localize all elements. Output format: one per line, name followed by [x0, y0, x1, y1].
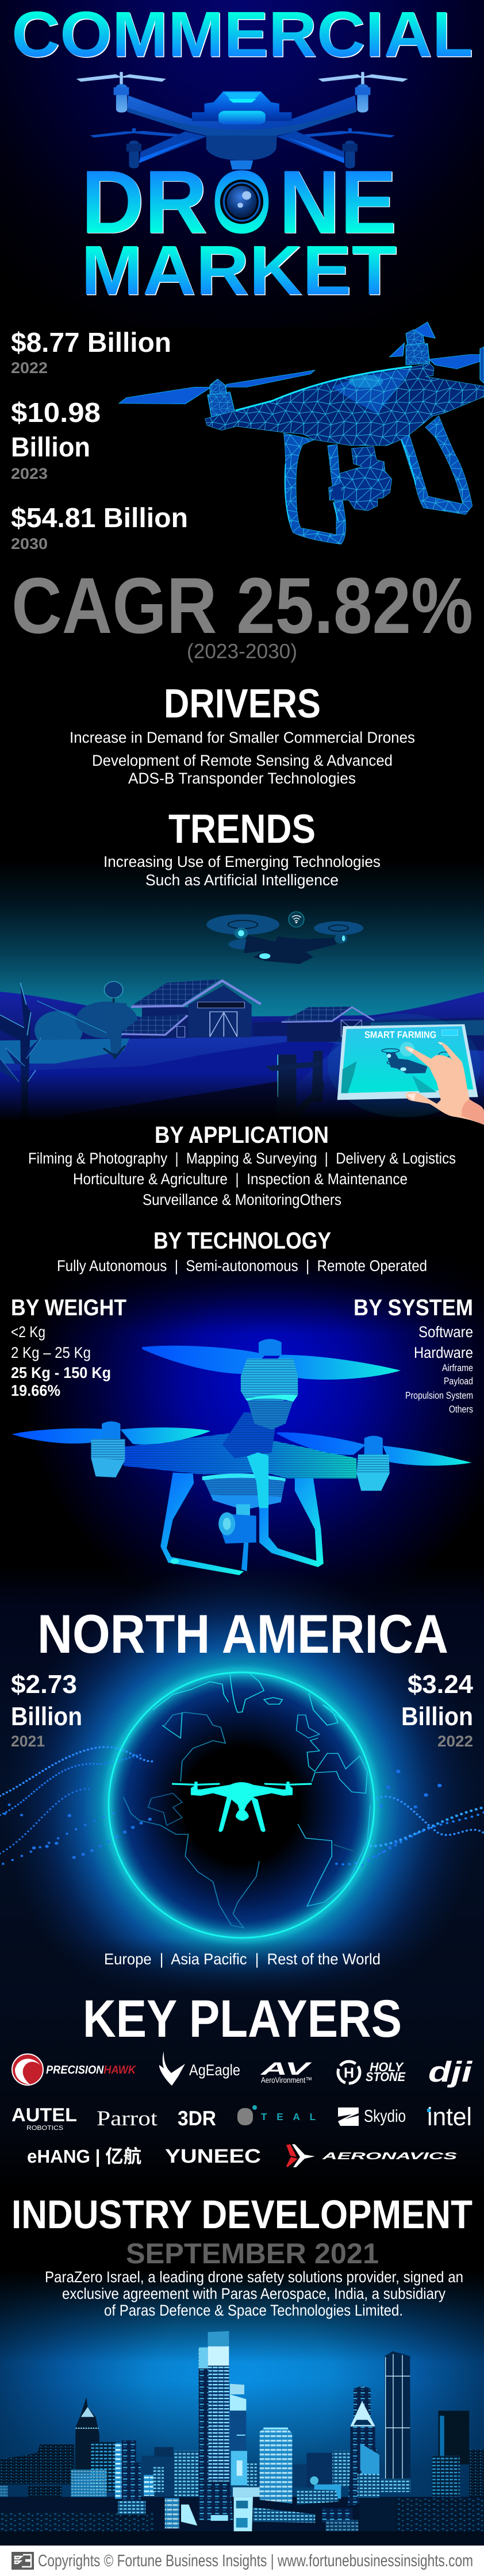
stat: $54.81 Billion 2030: 2030 — [11, 535, 48, 552]
logo: Teal: TEAL — [261, 2112, 316, 2122]
illustration: wireframe drone — [119, 322, 484, 544]
title line: MARKET: MARKET — [82, 232, 398, 310]
heading: KEY PLAYERS: KEY PLAYERS — [83, 1990, 402, 2048]
logo: Parrot: Parrot — [97, 2107, 158, 2130]
logo: Holy Stone: HOLY — [370, 2060, 404, 2074]
title line: COMMERCIAL: COMMERCIAL — [11, 0, 473, 70]
text block: system segments: Software — [418, 1323, 473, 1341]
text block: weight segments: 2 Kg – 25 Kg — [11, 1344, 91, 1361]
text block: drivers: ADS-B Transponder Technologies — [128, 770, 356, 787]
text block: system segments: Hardware — [414, 1344, 473, 1361]
logo: Yuneec: YUNEEC — [165, 2145, 261, 2167]
text block: system segments: Others — [449, 1404, 473, 1415]
stat: $54.81 Billion 2030: $54.81 Billion — [11, 503, 188, 533]
title line: DRONE: NE — [279, 152, 397, 252]
heading: CAGR 25.82%: (2023-2030) — [187, 639, 297, 663]
stat: $2.73 Billion 2021: 2021 — [11, 1733, 45, 1750]
illustration: globe with drone — [109, 1672, 374, 1938]
title line: COMMERCIAL: COMMERCIAL — [13, 0, 474, 71]
stat: $3.24 Billion 2022: Billion — [401, 1702, 473, 1731]
text block: development description: exclusive agreement with Paras Aerospace, India, a subsidiary — [62, 2285, 445, 2302]
stat: $2.73 Billion 2021: $2.73 — [11, 1669, 77, 1699]
logos: key players — [11, 2051, 473, 2167]
text block: development description: of Paras Defence & Space Technologies Limited. — [104, 2302, 403, 2319]
logo: Autel Robotics: AUTEL — [11, 2104, 77, 2125]
text block: trends — [103, 853, 381, 889]
stat: $2.73 Billion 2021: Billion — [11, 1702, 82, 1731]
logo: Holy Stone — [338, 2060, 406, 2084]
icon: Fortune Business Insights logo — [11, 2552, 34, 2570]
logo: AeroVironment: AeroVironment™ — [261, 2075, 312, 2084]
icon: flying drone with wifi — [206, 912, 363, 964]
stat: $3.24 Billion 2022: 2022 — [437, 1733, 473, 1750]
icon: tablet with hand: SMART FARMING — [364, 1030, 436, 1040]
illustration: smart farm at night — [0, 912, 484, 1138]
stat: $54.81 Billion 2030 — [11, 503, 188, 552]
stat: $10.98 Billion 2023: 2023 — [11, 465, 48, 482]
logo: Holy Stone: H — [344, 2065, 354, 2081]
stat: $10.98 Billion 2023: $10.98 — [11, 398, 101, 428]
stat: $3.24 Billion 2022: $3.24 — [408, 1669, 473, 1699]
text block: drivers: Increase in Demand for Smaller Commercial Drones — [70, 729, 415, 746]
text block: development description — [45, 2268, 463, 2319]
text block: system segments: Airframe — [442, 1362, 473, 1373]
heading: TRENDS: TRENDS — [168, 807, 316, 852]
text block: trends: Such as Artificial Intelligence — [145, 872, 339, 889]
logo: AgEagle — [159, 2051, 240, 2086]
title line: DRONE: O — [212, 152, 272, 252]
stat: $8.77 Billion 2022: 2022 — [11, 359, 48, 377]
logo: AeroVironment: AV — [260, 2059, 312, 2079]
text block: application segments: Horticulture & Agriculture | Inspection & Maintenance — [73, 1170, 408, 1188]
map outlines — [124, 1674, 370, 1928]
illustration: city skyline — [0, 2271, 484, 2546]
text block: technology segments: Fully Autonomous | Semi-autonomous | Remote Operated — [57, 1257, 427, 1274]
heading: BY SYSTEM: BY SYSTEM — [354, 1295, 473, 1320]
title line: DRONE: DR — [81, 152, 208, 252]
text block: weight segments: 19.66% — [11, 1382, 60, 1399]
logo: Teal — [237, 2105, 316, 2125]
text block: trends: Increasing Use of Emerging Technologies — [103, 853, 381, 870]
heading: BY TECHNOLOGY: BY TECHNOLOGY — [153, 1227, 331, 1254]
text block: application segments: Surveillance & MonitoringOthers — [143, 1191, 341, 1208]
logo: AeroVironment — [260, 2059, 312, 2084]
logo: Autel Robotics: ROBOTICS — [26, 2125, 63, 2132]
logo: Aeronavics: AERONAVICS — [321, 2151, 458, 2162]
title line: DRONE: NE — [279, 153, 398, 253]
text block: application segments — [28, 1150, 456, 1208]
title line: MARKET: MARKET — [81, 231, 397, 309]
stat: $3.24 Billion 2022 — [401, 1669, 473, 1750]
logo: Skydio: Skydio — [364, 2107, 406, 2126]
logo: Aeronavics — [286, 2144, 458, 2167]
title: Commercial Drone Market — [11, 0, 474, 310]
logo: PrecisionHawk — [12, 2054, 136, 2085]
text block: weight segments: 25 Kg - 150 Kg — [11, 1364, 111, 1381]
text block: system segments: Payload — [444, 1376, 473, 1387]
text block: system segments — [405, 1323, 473, 1415]
logo: Intel: intel — [427, 2103, 472, 2131]
logo: DJI: dji — [428, 2056, 473, 2088]
logo: EHang: eHANG | 亿航 — [27, 2146, 141, 2167]
illustration: blue line-art drone — [11, 1339, 472, 1575]
text block: drivers: Development of Remote Sensing & Advanced — [92, 752, 393, 769]
stat: $8.77 Billion 2022: $8.77 Billion — [11, 328, 171, 358]
heading: SEPTEMBER 2021: SEPTEMBER 2021 — [126, 2237, 379, 2270]
heading: BY APPLICATION: BY APPLICATION — [155, 1122, 329, 1148]
illustration: particle waves — [0, 1747, 484, 1869]
logo: Holy Stone: STONE — [366, 2070, 406, 2084]
stat: $10.98 Billion 2023 — [11, 398, 101, 482]
logo: 3DR: 3DR — [178, 2106, 216, 2130]
text block: regions: Europe | Asia Pacific | Rest of the World — [104, 1951, 381, 1968]
title line: DRONE: DR — [82, 153, 208, 253]
text block: weight segments — [11, 1323, 111, 1399]
footer: copyright bar — [0, 2546, 484, 2576]
icon: title quadcopter — [76, 72, 408, 170]
heading: BY WEIGHT: BY WEIGHT — [11, 1295, 126, 1320]
logo: AgEagle: AgEagle — [189, 2061, 240, 2079]
text block: drivers — [70, 729, 415, 787]
stat: $10.98 Billion 2023: Billion — [11, 432, 90, 463]
stat: $2.73 Billion 2021 — [11, 1669, 82, 1750]
heading: DRIVERS: DRIVERS — [164, 681, 321, 727]
logo: Skydio — [338, 2107, 406, 2126]
icon: tablet with hand — [328, 1013, 484, 1125]
logo: PrecisionHawk: PRECISIONHAWK — [46, 2064, 136, 2076]
stat: $8.77 Billion 2022 — [11, 328, 171, 377]
title line: DRONE — [81, 152, 398, 253]
icon: drone silhouette — [172, 1782, 312, 1832]
text block: weight segments: <2 Kg — [11, 1323, 45, 1341]
